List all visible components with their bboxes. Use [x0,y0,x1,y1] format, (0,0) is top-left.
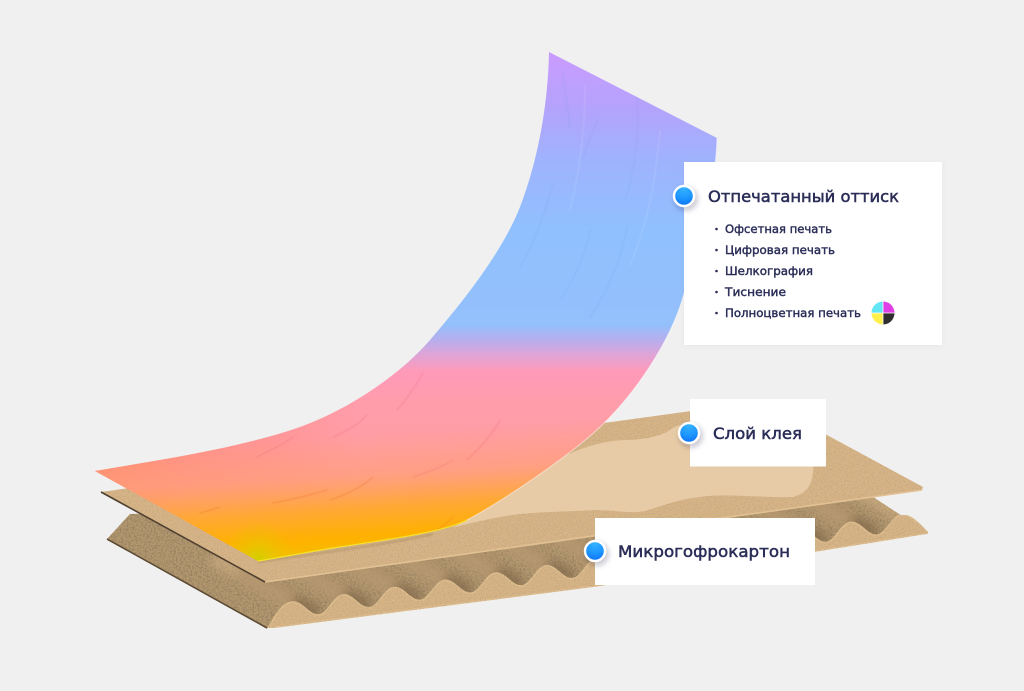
panel: glue layer label [679,399,826,466]
list of print methods: Офсетная печать [725,222,832,236]
list of print methods: Шелкография [725,264,813,278]
liner dark side edge [101,492,265,582]
panel: microflute cardboard label [585,518,815,585]
corrugated inner surface [107,498,900,628]
list of print methods: Цифровая печать [725,243,835,257]
sheet wrinkles [200,73,660,530]
marker: printed impression [674,186,694,206]
marker: microflute cardboard [585,541,605,561]
corrugated front profile [268,515,928,628]
heading: printed impression: Отпечатанный оттиск [708,187,899,206]
corrugated cardboard layer [106,498,928,629]
sheet light right edge [467,138,717,520]
panel: printed impression [674,162,942,345]
marker: glue layer [679,423,699,443]
label: microflute cardboard: Микрогофрокартон [618,542,790,561]
printed sheet [90,52,717,601]
glue layer [453,420,813,528]
label: glue layer: Слой клея [713,424,802,443]
top cardboard liner [101,401,923,582]
sheet colour gradient [95,52,717,561]
list of print methods: Тиснение [724,285,786,299]
list of print methods [715,222,861,320]
sheet left salmon tint and orange-yellow band [95,422,596,561]
list of print methods: Полноцветная печать [725,306,861,320]
sheet yellow lower edge [258,520,467,561]
corrugated dark side edge [107,539,267,628]
icon: CMYK circle [871,301,895,325]
sheet shadow on the board [258,534,433,562]
liner front edge [265,490,922,582]
